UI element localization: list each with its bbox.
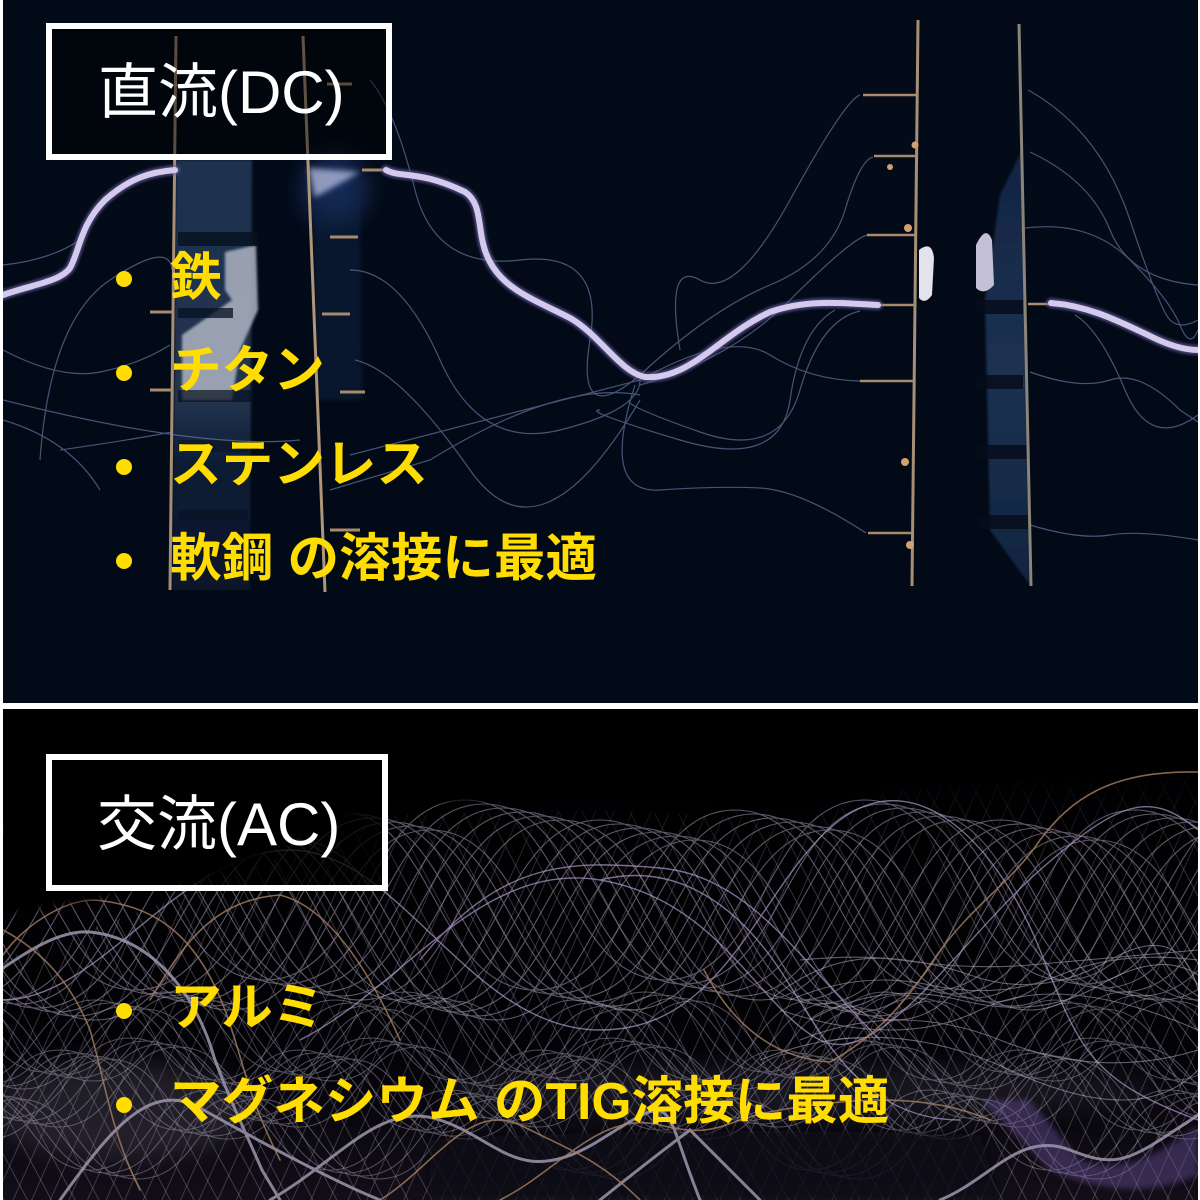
list item: iron <box>116 248 222 306</box>
DC heading box <box>49 26 389 157</box>
thin wires <box>3 80 1198 540</box>
list item: titanium: チタン <box>170 341 325 399</box>
bright arc wires <box>3 170 1198 377</box>
panel: direct current (DC) <box>3 0 1198 703</box>
DC photo background <box>3 0 1198 703</box>
fine hatch lines <box>3 770 1198 1200</box>
mid-right bright mesh <box>760 945 1198 1100</box>
list item: stainless steel: ステンレス <box>170 435 428 493</box>
black sky mask <box>3 800 492 916</box>
AC light-trail background <box>0 700 1200 1200</box>
list item: iron: 鉄 <box>170 248 222 306</box>
upper wave mesh <box>0 800 1200 1020</box>
haze <box>0 1060 250 1160</box>
DC heading box: 直流(DC) <box>98 59 345 126</box>
list item: aluminium: アルミ <box>170 978 324 1036</box>
bright grey and tan curves <box>3 772 1198 1200</box>
list item: mild steel: 軟鋼 の溶接に最適 <box>170 529 597 587</box>
list item: magnesium: マグネシウム のTIG溶接に最適 <box>170 1072 889 1130</box>
purple ribbon <box>980 1100 1198 1189</box>
left electrode plate <box>150 36 386 592</box>
lower dense band <box>0 992 1200 1179</box>
AC heading box <box>49 757 385 888</box>
right electrode plate <box>860 20 1050 586</box>
AC materials list <box>116 978 889 1130</box>
DC materials list <box>116 248 597 587</box>
darker bottom strip <box>430 1131 1000 1200</box>
panel: alternating current (AC) <box>0 700 1200 1200</box>
AC heading box: 交流(AC) <box>97 791 340 858</box>
